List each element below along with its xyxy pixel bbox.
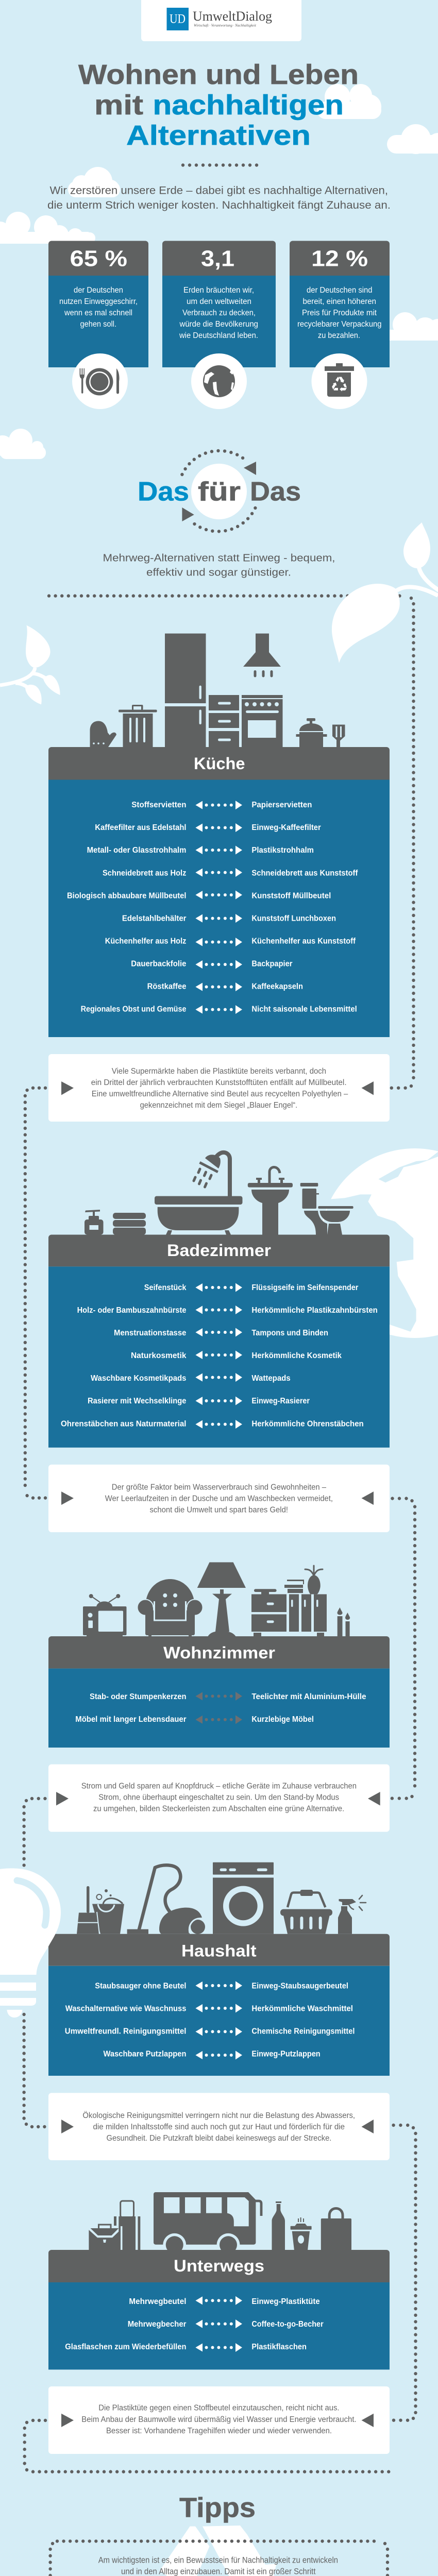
- title: Wohnen und Leben: [78, 59, 359, 90]
- row: Kosmetik: Herkömmliche Kosmetik: [251, 1351, 342, 1360]
- row: Müllbeutel: Biologisch abbaubare Müllbeutel: [67, 891, 187, 901]
- arrow: right into note: [368, 1792, 380, 1805]
- header: Unterwegs: [174, 2257, 264, 2275]
- comparison list: [48, 2282, 390, 2369]
- note: Reinigungsmittel: Ökologische Reinigungsmittel verringern nicht nur die Belastung des Abwassers,: [82, 2111, 355, 2120]
- row: Möbel: [75, 1715, 314, 1724]
- description: gehen soll.: [80, 320, 116, 329]
- description: Erden bräuchten wir,: [183, 286, 254, 295]
- row: Strohhalm: Plastikstrohhalm: [251, 846, 314, 855]
- row: Kosmetik: [131, 1351, 342, 1360]
- arrow: left out of note: [61, 1081, 74, 1095]
- note: Plastiktüte: Besser ist: Vorhandene Tragehilfen wieder und wieder verwenden.: [106, 2427, 332, 2435]
- row: Schneidebrett: Schneidebrett aus Holz: [103, 869, 187, 877]
- number: 3,1: [201, 246, 234, 271]
- description: bereit, einen höheren: [303, 297, 376, 306]
- row: Behälter: Edelstahlbehälter: [122, 914, 187, 923]
- row: Flaschen: Plastikflaschen: [251, 2343, 307, 2351]
- stat card: 12 %: [290, 241, 390, 367]
- row: Flaschen: Glasflaschen zum Wiederbefüllen: [65, 2343, 187, 2351]
- arrow: left out of note: [61, 1492, 74, 1505]
- title divider dots: [183, 163, 258, 167]
- note: Stand-by: Strom und Geld sparen auf Knopfdruck – etliche Geräte im Zuhause verbrauchen: [81, 1782, 357, 1790]
- row: Lebensmittel: Regionales Obst und Gemüse: [81, 1005, 187, 1013]
- icon: plate and cutlery: [72, 353, 128, 409]
- description: [179, 286, 258, 340]
- arrow: right into note: [362, 1081, 374, 1095]
- row: Seife: Seifenstück: [144, 1283, 187, 1292]
- description: der Deutschen sind: [307, 286, 372, 295]
- heading text: Das: [138, 477, 189, 507]
- row: Zahnbürste: Holz- oder Bambuszahnbürste: [77, 1306, 187, 1315]
- panel: Tipps: [50, 2541, 388, 2576]
- row: Stoffservietten vs Papierservietten: [131, 801, 312, 809]
- logo wordmark: UmweltDialog: [193, 9, 272, 24]
- note: Müllbeutel: [48, 1054, 390, 1122]
- row: Ohrenstäbchen: Herkömmliche Ohrenstäbchen: [251, 1419, 364, 1428]
- header: Haushalt: [181, 1941, 257, 1960]
- note: Müllbeutel: gekennzeichnet mit dem Siegel „Blauer Engel“.: [140, 1101, 297, 1110]
- header: [48, 1636, 390, 1669]
- description: recyclebarer Verpackung: [297, 320, 381, 329]
- description: [59, 286, 138, 329]
- note: Reinigungsmittel: [48, 2093, 390, 2160]
- row: Kaffeefilter: [95, 823, 321, 832]
- icon: globe: [191, 353, 247, 409]
- row: Waschmittel: [65, 2004, 353, 2013]
- logo card: [141, 0, 301, 41]
- row: Kosmetikpads: [91, 1373, 291, 1383]
- row: Kerzen: Stab- oder Stumpenkerzen: [90, 1692, 187, 1701]
- row: Rasierer: [88, 1396, 310, 1405]
- title: [78, 59, 359, 151]
- row: Behälter: [122, 914, 336, 923]
- intro text: und in den Alltag einzubauen. Damit ist ein großer Schritt: [121, 2566, 316, 2576]
- row: Seife: Flüssigseife im Seifenspender: [251, 1283, 358, 1292]
- decorative recycling symbol: [109, 2526, 313, 2576]
- row: Reinigungsmittel: Chemische Reinigungsmittel: [251, 2027, 355, 2036]
- note: Plastiktüte: Beim Anbau der Baumwolle wird übermäßig viel Wasser und Energie verbraucht.: [81, 2415, 357, 2424]
- intro text: [98, 2555, 338, 2576]
- note: Müllbeutel: Eine umweltfreundliche Alternative sind Beutel aus recycelten Polyethylen –: [92, 1090, 348, 1098]
- row: Flaschen: [65, 2343, 307, 2352]
- description: Verbrauch zu decken,: [182, 309, 256, 317]
- header: [48, 747, 390, 780]
- decorative earth: [317, 1148, 438, 1338]
- description: würde die Bevölkerung: [179, 320, 258, 329]
- logo mark: UD: [170, 12, 186, 26]
- dotted frame: [50, 2541, 388, 2576]
- row: Stoffservietten vs Papierservietten: Stoffservietten: [131, 801, 187, 809]
- clouds and leaves: [0, 84, 438, 704]
- intro text: die unterm Strich weniger kosten. Nachhaltigkeit fängt Zuhause an.: [47, 199, 391, 211]
- panel: Küche: [48, 634, 390, 1037]
- intro text: [47, 184, 391, 211]
- row: Kosmetikpads: Waschbare Kosmetikpads: [91, 1374, 187, 1383]
- row: Stoffservietten vs Papierservietten: Papierservietten: [251, 801, 312, 809]
- dotted route: [24, 596, 416, 2472]
- row: Strohhalm: [87, 846, 314, 855]
- icon: recycling bin: [311, 353, 367, 409]
- comparison list: [48, 1266, 390, 1448]
- description: der Deutschen: [74, 286, 123, 295]
- header: [48, 1234, 390, 1266]
- row: Putzlappen: [103, 2050, 321, 2060]
- header: Wohnzimmer: [163, 1643, 275, 1662]
- row: Becher: [128, 2319, 324, 2329]
- header: Badezimmer: [167, 1241, 271, 1260]
- row: Kaffeefilter: Kaffeefilter aus Edelstahl: [95, 823, 187, 832]
- panel: Wohnzimmer: [48, 1562, 390, 1748]
- row: Lebensmittel: Nicht saisonale Lebensmittel: [251, 1005, 357, 1013]
- illustration: kitchen: [90, 634, 345, 747]
- row: Schneidebrett: Schneidebrett aus Kunststoff: [251, 869, 358, 877]
- decorative light bulb: [0, 1868, 61, 2018]
- row: Menstruation: [114, 1328, 328, 1337]
- panel: Haushalt: [48, 1862, 390, 2076]
- arrow: left out of note: [61, 2414, 74, 2427]
- number: 12 %: [311, 246, 368, 271]
- title: Alternativen: [126, 120, 311, 151]
- description: Preis für Produkte mit: [302, 309, 377, 317]
- illustration: on the go: [89, 2192, 351, 2257]
- row: Staubsauger: Staubsauger ohne Beutel: [95, 1981, 187, 1990]
- note: Stand-by: zu umgehen, bilden Steckerleisten zum Abschalten eine grüne Alternative.: [93, 1804, 344, 1813]
- row: Ohrenstäbchen: Ohrenstäbchen aus Naturmaterial: [61, 1419, 187, 1428]
- title: nachhaltigen: [153, 90, 344, 121]
- note: Wasserverbrauch: Der größte Faktor beim Wasserverbrauch sind Gewohnheiten –: [112, 1483, 326, 1492]
- row: Strohhalm: Metall- oder Glasstrohhalm: [87, 846, 187, 855]
- row: Kerzen: Teelichter mit Aluminium-Hülle: [251, 1692, 366, 1701]
- note: Reinigungsmittel: die milden Inhaltsstoffe sind auch noch gut zur Haut und förderlich für die: [93, 2123, 345, 2131]
- section subtitle: Mehrweg-Alternativen statt Einweg - bequem,: [103, 553, 335, 564]
- row: Waschmittel: Waschalternative wie Waschnuss: [65, 2004, 187, 2013]
- note: Wasserverbrauch: Wer Leerlaufzeiten in der Dusche und am Waschbecken vermeidet,: [105, 1494, 333, 1503]
- row: Rasierer: Rasierer mit Wechselklinge: [88, 1397, 187, 1405]
- arrow: right into note: [362, 2120, 374, 2133]
- row: Küchenhelfer: Küchenhelfer aus Holz: [105, 937, 187, 946]
- logo mark: [167, 8, 189, 30]
- row: Waschmittel: Herkömmliche Waschmittel: [251, 2004, 353, 2013]
- cycle arrows: [182, 451, 256, 531]
- note: Stand-by: Strom, ohne überhaupt eingeschaltet zu sein. Um den Stand-by Modus: [98, 1793, 339, 1802]
- row: Beutel: [129, 2296, 320, 2306]
- row: Staubsauger: Einweg-Staubsaugerbeutel: [251, 1981, 348, 1990]
- row: Beutel: Einweg-Plastiktüte: [251, 2297, 320, 2306]
- note: Müllbeutel: ein Drittel der jährlich verbrauchten Kunststofftüten entfällt auf Müllbeutel.: [91, 1078, 347, 1087]
- row: Kerzen: [90, 1692, 366, 1701]
- intro text: Am wichtigsten ist es, ein Bewusstsein für Nachhaltigkeit zu entwickeln: [98, 2555, 338, 2565]
- title: mit: [94, 90, 143, 121]
- header: [48, 2250, 390, 2282]
- row: Menstruation: Tampons und Binden: [251, 1329, 328, 1337]
- illustration: bathroom: [85, 1153, 353, 1235]
- arrow: right into note: [362, 2414, 374, 2427]
- description: um den weltweiten: [187, 297, 251, 306]
- row: Kosmetikpads: Wattepads: [251, 1374, 291, 1383]
- heading: Tipps: Tipps: [179, 2493, 256, 2523]
- description: zu bezahlen.: [318, 331, 360, 340]
- row: Möbel: Kurzlebige Möbel: [251, 1715, 314, 1724]
- row: Staubsauger: [95, 1981, 348, 1990]
- header: [48, 1934, 390, 1966]
- row: Zahnbürste: [77, 1306, 378, 1315]
- row: Müllbeutel: Kunststoff Müllbeutel: [251, 891, 331, 901]
- row: Reinigungsmittel: [65, 2027, 355, 2036]
- description: wenn es mal schnell: [64, 309, 132, 317]
- heading text: [138, 477, 301, 507]
- intro text: Wir zerstören unsere Erde – dabei gibt es nachhaltige Alternativen,: [49, 184, 388, 197]
- illustration: living room: [83, 1562, 350, 1637]
- row: Becher: Coffee-to-go-Becher: [251, 2320, 324, 2329]
- note: Wasserverbrauch: [48, 1465, 390, 1532]
- row: Kaffee: Röstkaffee: [147, 982, 187, 991]
- row: Seife: [144, 1283, 358, 1292]
- header: Küche: [194, 754, 245, 773]
- section subtitle: [103, 553, 335, 579]
- row: Menstruation: Menstruationstasse: [114, 1329, 187, 1337]
- illustration: household: [77, 1862, 366, 1934]
- row: Ohrenstäbchen: [61, 1419, 364, 1429]
- row: Backfolie: Backpapier: [251, 960, 293, 969]
- description: nutzen Einweggeschirr,: [59, 297, 138, 306]
- row: Kosmetik: Naturkosmetik: [131, 1351, 187, 1360]
- row: Backfolie: Dauerbackfolie: [131, 960, 187, 969]
- row: Beutel: Mehrwegbeutel: [129, 2297, 187, 2306]
- comparison list: [48, 1966, 390, 2076]
- comparison list: [48, 780, 390, 1037]
- heading text: Das: [250, 477, 301, 507]
- row: Lebensmittel: [81, 1005, 357, 1014]
- logo tagline: Wirtschaft · Verantwortung · Nachhaltigkeit: [194, 23, 257, 28]
- row: Schneidebrett: [103, 868, 358, 877]
- panel: Unterwegs: [48, 2192, 390, 2369]
- number: 65 %: [70, 246, 127, 271]
- row: Rasierer: Einweg-Rasierer: [251, 1397, 310, 1405]
- row: Küchenhelfer: Küchenhelfer aus Kunststoff: [251, 937, 356, 946]
- section heading: Das für Das: [138, 451, 301, 531]
- note: Stand-by: [48, 1764, 390, 1832]
- description: [297, 286, 381, 340]
- note: Reinigungsmittel: Gesundheit. Die Putzkraft bleibt dabei keineswegs auf der Strecke.: [106, 2134, 331, 2143]
- row: Reinigungsmittel: Umweltfreundl. Reinigungsmittel: [65, 2027, 187, 2036]
- panel: Badezimmer: [48, 1153, 390, 1448]
- comparison list: [48, 1669, 390, 1748]
- row: Küchenhelfer: [105, 937, 356, 946]
- arrow: left out of note: [56, 1792, 69, 1805]
- row: Backfolie: [131, 960, 292, 969]
- right leaf branch: [332, 522, 438, 663]
- row: Becher: Mehrwegbecher: [128, 2320, 187, 2329]
- section subtitle: effektiv und sogar günstiger.: [146, 567, 291, 579]
- stat card: 3,1: [162, 241, 276, 367]
- heading text: für: [198, 477, 241, 507]
- note: Plastiktüte: Die Plastiktüte gegen einen Stoffbeutel einzutauschen, reicht nicht aus.: [98, 2404, 340, 2413]
- row: Möbel: Möbel mit langer Lebensdauer: [75, 1715, 187, 1724]
- row: Behälter: Kunststoff Lunchboxen: [251, 914, 336, 923]
- arrow: right into note: [362, 1492, 374, 1505]
- row: Müllbeutel: [67, 890, 331, 901]
- row: Putzlappen: Einweg-Putzlappen: [251, 2050, 321, 2059]
- row: Putzlappen: Waschbare Putzlappen: [103, 2050, 187, 2059]
- arrow: left out of note: [61, 2120, 74, 2133]
- note: Plastiktüte: [48, 2386, 390, 2454]
- note: Müllbeutel: Viele Supermärkte haben die Plastiktüte bereits verbannt, doch: [112, 1067, 326, 1076]
- description: wie Deutschland leben.: [179, 331, 258, 340]
- row: Kaffee: Kaffeekapseln: [251, 982, 303, 991]
- row: Kaffee: [147, 982, 303, 991]
- row: Kaffeefilter: Einweg-Kaffeefilter: [251, 823, 321, 832]
- row: Zahnbürste: Herkömmliche Plastikzahnbürsten: [251, 1306, 378, 1315]
- note: Wasserverbrauch: schont die Umwelt und spart bares Geld!: [149, 1506, 288, 1515]
- stat card: 65 %: [48, 241, 148, 367]
